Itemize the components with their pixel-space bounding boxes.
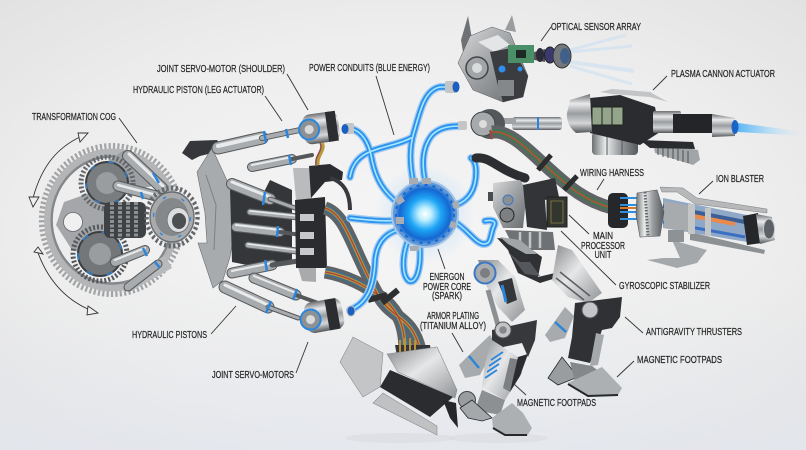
- label: ion blaster: ION BLASTER: [716, 174, 764, 185]
- head with optical sensor: [458, 15, 634, 102]
- heat sink: [653, 142, 700, 165]
- shin: [482, 337, 522, 400]
- label: magnetic footpads right: MAGNETIC FOOTPADS: [637, 355, 722, 366]
- knee pad: [568, 297, 622, 363]
- ankle: [548, 357, 578, 385]
- label: energon power core: [423, 272, 471, 302]
- label: energon power core: (SPARK): [432, 291, 462, 302]
- label: armor plating: [420, 311, 486, 332]
- thruster: [545, 307, 574, 342]
- label: hydraulic piston leg actuator: HYDRAULIC PISTON (LEG ACTUATOR): [133, 85, 264, 96]
- top rail: [660, 187, 767, 213]
- servo: lower: [298, 297, 346, 335]
- label: armor plating: (TITANIUM ALLOY): [420, 321, 486, 332]
- label: power conduits: POWER CONDUITS (BLUE ENERGY): [309, 63, 430, 74]
- label: optical sensor array: OPTICAL SENSOR ARRAY: [551, 22, 641, 33]
- wiring bundle: [325, 208, 420, 352]
- mount plate: [182, 140, 225, 160]
- hydraulic assembly: [182, 111, 350, 335]
- label: magnetic footpads lower: MAGNETIC FOOTPADS: [517, 398, 596, 409]
- label: joint servo-motor shoulder: JOINT SERVO-MOTOR (SHOULDER): [157, 64, 285, 75]
- energon power core: [375, 164, 475, 264]
- foot pad: [492, 403, 532, 436]
- pistons: [218, 129, 318, 318]
- lower rail: [690, 232, 765, 254]
- transformation cog: [42, 146, 198, 294]
- shoulder joint and wiring harness: [471, 109, 612, 208]
- label: antigravity thrusters: ANTIGRAVITY THRUSTERS: [646, 327, 742, 338]
- gear: lower: [73, 227, 127, 281]
- connector wires: [316, 143, 323, 165]
- bracket: [293, 168, 312, 200]
- robot torso: [476, 158, 567, 283]
- ankle: [475, 390, 505, 415]
- label: armor plating: ARMOR PLATING: [427, 311, 479, 322]
- ion blaster: [608, 187, 775, 268]
- label: energon power core: ENERGON: [430, 272, 464, 283]
- shaft pistons: [115, 154, 163, 287]
- foot pad: [568, 367, 622, 397]
- left leg: [458, 260, 537, 436]
- thruster hose: [476, 158, 525, 178]
- label: main processor unit: PROCESSOR: [581, 241, 625, 252]
- lens array: [534, 44, 571, 68]
- label: main processor unit: UNIT: [594, 250, 612, 261]
- label: main processor unit: [581, 231, 625, 261]
- label: main processor unit: MAIN: [593, 231, 613, 242]
- label: hydraulic pistons: HYDRAULIC PISTONS: [132, 330, 207, 341]
- rear collar: [608, 193, 628, 228]
- gear: upper: [81, 157, 133, 209]
- light beams: [570, 35, 634, 84]
- servo: shoulder: [297, 111, 341, 146]
- label: wiring harness: WIRING HARNESS: [580, 168, 644, 179]
- gear: centre stack: [104, 202, 146, 238]
- sensor circuit board: [508, 45, 534, 63]
- callout lines: [119, 27, 713, 395]
- ring: [636, 190, 664, 237]
- conduit end caps: [342, 81, 467, 316]
- icon: rotation arrows: [29, 133, 98, 315]
- label: transformation cog: TRANSFORMATION COG: [32, 112, 116, 123]
- right leg: [545, 245, 622, 397]
- gear: front: [146, 188, 198, 246]
- thruster: [459, 335, 496, 378]
- plasma cannon: [567, 89, 806, 165]
- main processor chip: [547, 197, 567, 227]
- label: gyroscopic stabilizer: GYROSCOPIC STABILIZER: [619, 281, 710, 292]
- power conduits: [342, 81, 495, 316]
- grip: [647, 240, 707, 268]
- energy chamber: [663, 198, 747, 242]
- label: joint servo-motors: JOINT SERVO-MOTORS: [212, 370, 294, 381]
- knee pad: [492, 320, 537, 357]
- armor plating: [340, 337, 458, 435]
- muzzle: [743, 213, 762, 245]
- pelvis: [497, 238, 565, 283]
- label: energon power core: POWER CORE: [423, 282, 471, 293]
